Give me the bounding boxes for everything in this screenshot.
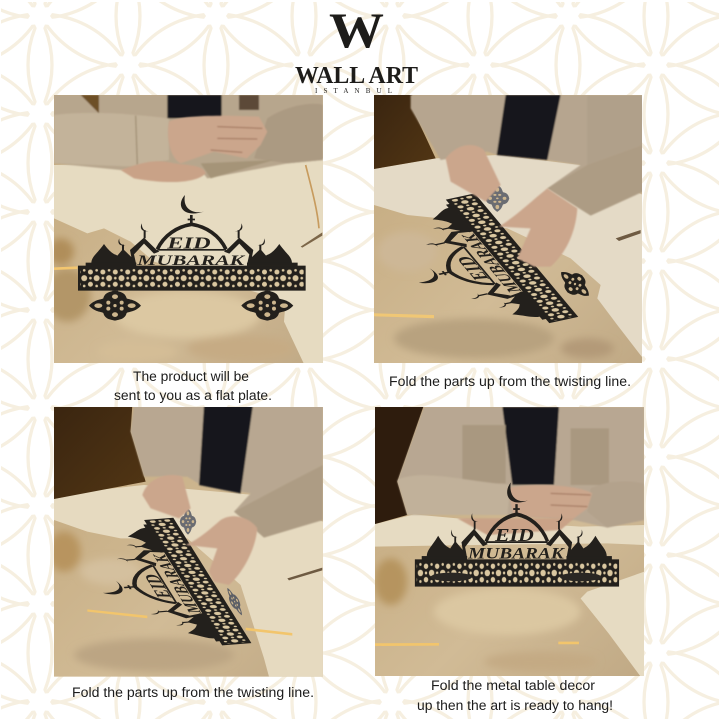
caption step 4: up then the art is ready to hang! [417, 698, 613, 713]
step 1 scene [44, 95, 323, 364]
hands [142, 475, 257, 585]
folded pendants behind band [431, 573, 601, 581]
ornament word EID: EID [166, 234, 211, 253]
metal ornament rotated [103, 518, 252, 646]
caption step 3: Fold the parts up from the twisting line. [72, 685, 314, 700]
marble table [47, 405, 323, 677]
dark background [374, 405, 424, 524]
logo: Wall Art Istanbul [295, 2, 418, 95]
stems [112, 290, 270, 292]
metal ornament standing [415, 482, 619, 587]
ornament word EID: EID [453, 254, 494, 283]
metal ornament flat [78, 195, 306, 321]
marble table [44, 95, 323, 364]
logo monogram: W [329, 2, 384, 58]
caption step 1 [114, 369, 272, 403]
shirt and arms [131, 405, 323, 538]
hands [457, 485, 592, 535]
metal ornament rotated [419, 194, 578, 324]
shirt and arms [54, 95, 323, 178]
shirt and arms [397, 407, 644, 528]
ornament word MUBARAK: MUBARAK [458, 231, 527, 295]
shirt and arms [411, 95, 643, 216]
right pendant [241, 291, 293, 321]
hands [446, 145, 577, 267]
ornament word EID: EID [140, 573, 177, 600]
panel: step 2 photo [364, 95, 643, 364]
panel: step 1 photo [44, 95, 323, 364]
caption step 1: The product will be [133, 369, 249, 384]
dark background [54, 405, 146, 499]
step 3 scene [47, 405, 323, 677]
grey pendant folded [227, 588, 242, 616]
grey pendant held [485, 185, 509, 212]
hands [121, 116, 267, 182]
caption step 1: sent to you as a flat plate. [114, 388, 272, 403]
ornament word MUBARAK: MUBARAK [136, 253, 246, 269]
step 2 scene [364, 95, 643, 364]
panel: step 4 photo [374, 405, 644, 677]
logo subtitle: ISTANBUL [315, 87, 392, 95]
marble table [374, 95, 643, 364]
left pendant [89, 291, 141, 321]
caption step 4 [417, 678, 613, 713]
caption step 4: Fold the metal table decor [431, 678, 596, 693]
caption step 2: Fold the parts up from the twisting line. [389, 374, 631, 389]
logo name: WALL ART [295, 63, 418, 89]
step 4 scene [374, 405, 644, 677]
marble table [374, 405, 644, 677]
ornament word EID: EID [494, 524, 534, 545]
panel: step 3 photo [47, 405, 323, 677]
black pendant on table [561, 272, 589, 296]
grey pendant held [180, 509, 196, 535]
ornament word MUBARAK: MUBARAK [467, 546, 565, 563]
dark background [374, 95, 436, 169]
ornament word MUBARAK: MUBARAK [150, 552, 207, 615]
